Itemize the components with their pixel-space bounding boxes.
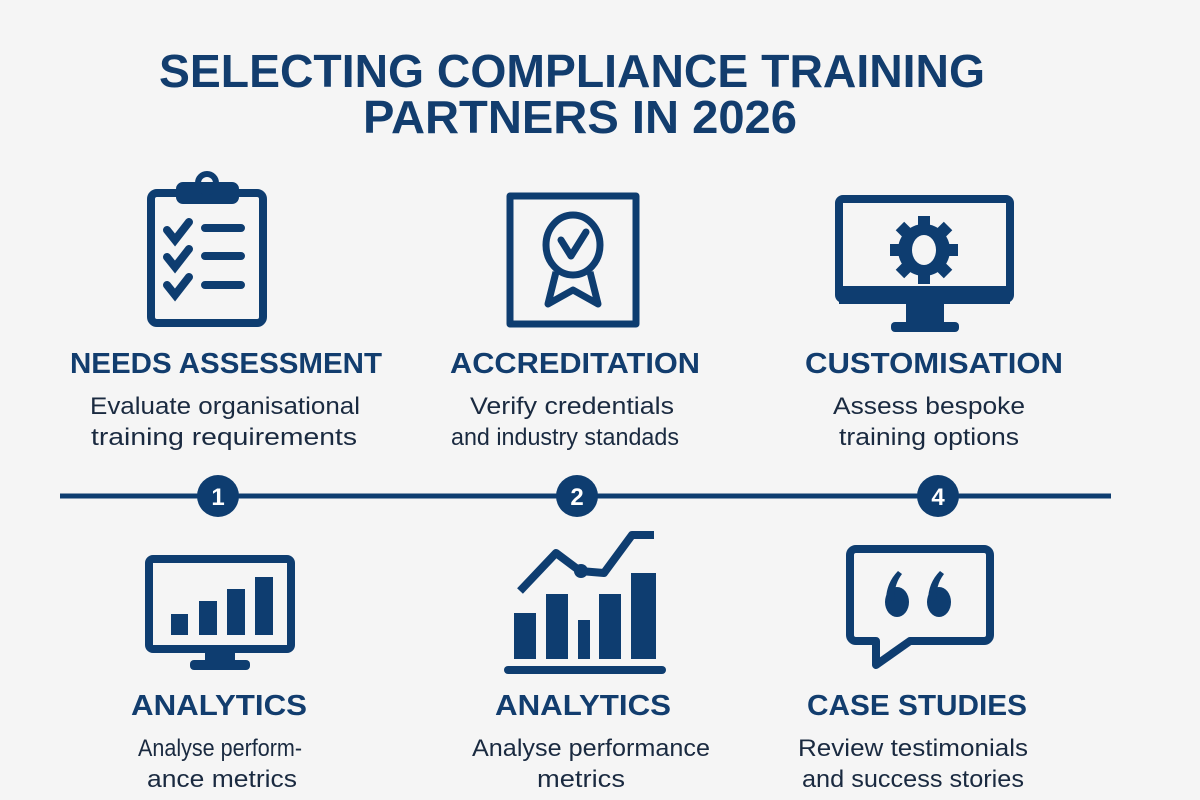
text: customisation: Assess bespoke — [833, 393, 1025, 420]
text: case studies — [798, 735, 1028, 793]
heading: customisation: CUSTOMISATION — [805, 348, 1063, 380]
text: analytics 2 — [472, 735, 710, 793]
icon: certificate — [510, 196, 636, 324]
heading: accreditation: ACCREDITATION — [450, 348, 700, 380]
timeline: 2 — [570, 484, 584, 511]
text: analytics 1: Analyse perform- — [138, 735, 302, 762]
timeline — [60, 475, 1111, 517]
text: accreditation: and industry standads — [451, 424, 679, 451]
icon: monitor gear — [839, 199, 1010, 332]
title — [159, 45, 985, 143]
text: case studies: and success stories — [802, 766, 1024, 793]
heading: needs assessment: NEEDS ASSESSMENT — [70, 348, 382, 380]
icon: speech bubble quote — [850, 549, 990, 665]
timeline: 4 — [931, 484, 945, 511]
icon: clipboard — [151, 174, 263, 323]
text: needs — [90, 393, 360, 451]
text: customisation: training options — [839, 424, 1019, 451]
text: analytics 1 — [138, 735, 302, 793]
heading: analytics 1: ANALYTICS — [131, 690, 307, 722]
icon: monitor bar chart — [149, 559, 291, 670]
icon: growth chart — [504, 535, 666, 674]
timeline: 1 — [211, 484, 225, 511]
title: SELECTING COMPLIANCE TRAINING — [159, 45, 985, 97]
text: needs: training requirements — [91, 424, 357, 451]
text: analytics 2: metrics — [537, 766, 625, 793]
heading: case studies: CASE STUDIES — [807, 690, 1027, 722]
title: PARTNERS IN 2026 — [363, 91, 797, 143]
text: accreditation: Verify credentials — [470, 393, 674, 420]
text: customisation — [833, 393, 1025, 451]
text: needs: Evaluate organisational — [90, 393, 360, 420]
text: case studies: Review testimonials — [798, 735, 1028, 762]
text: analytics 1: ance metrics — [147, 766, 297, 793]
text: accreditation — [451, 393, 679, 451]
text: analytics 2: Analyse performance — [472, 735, 710, 762]
heading: analytics 2: ANALYTICS — [495, 690, 671, 722]
